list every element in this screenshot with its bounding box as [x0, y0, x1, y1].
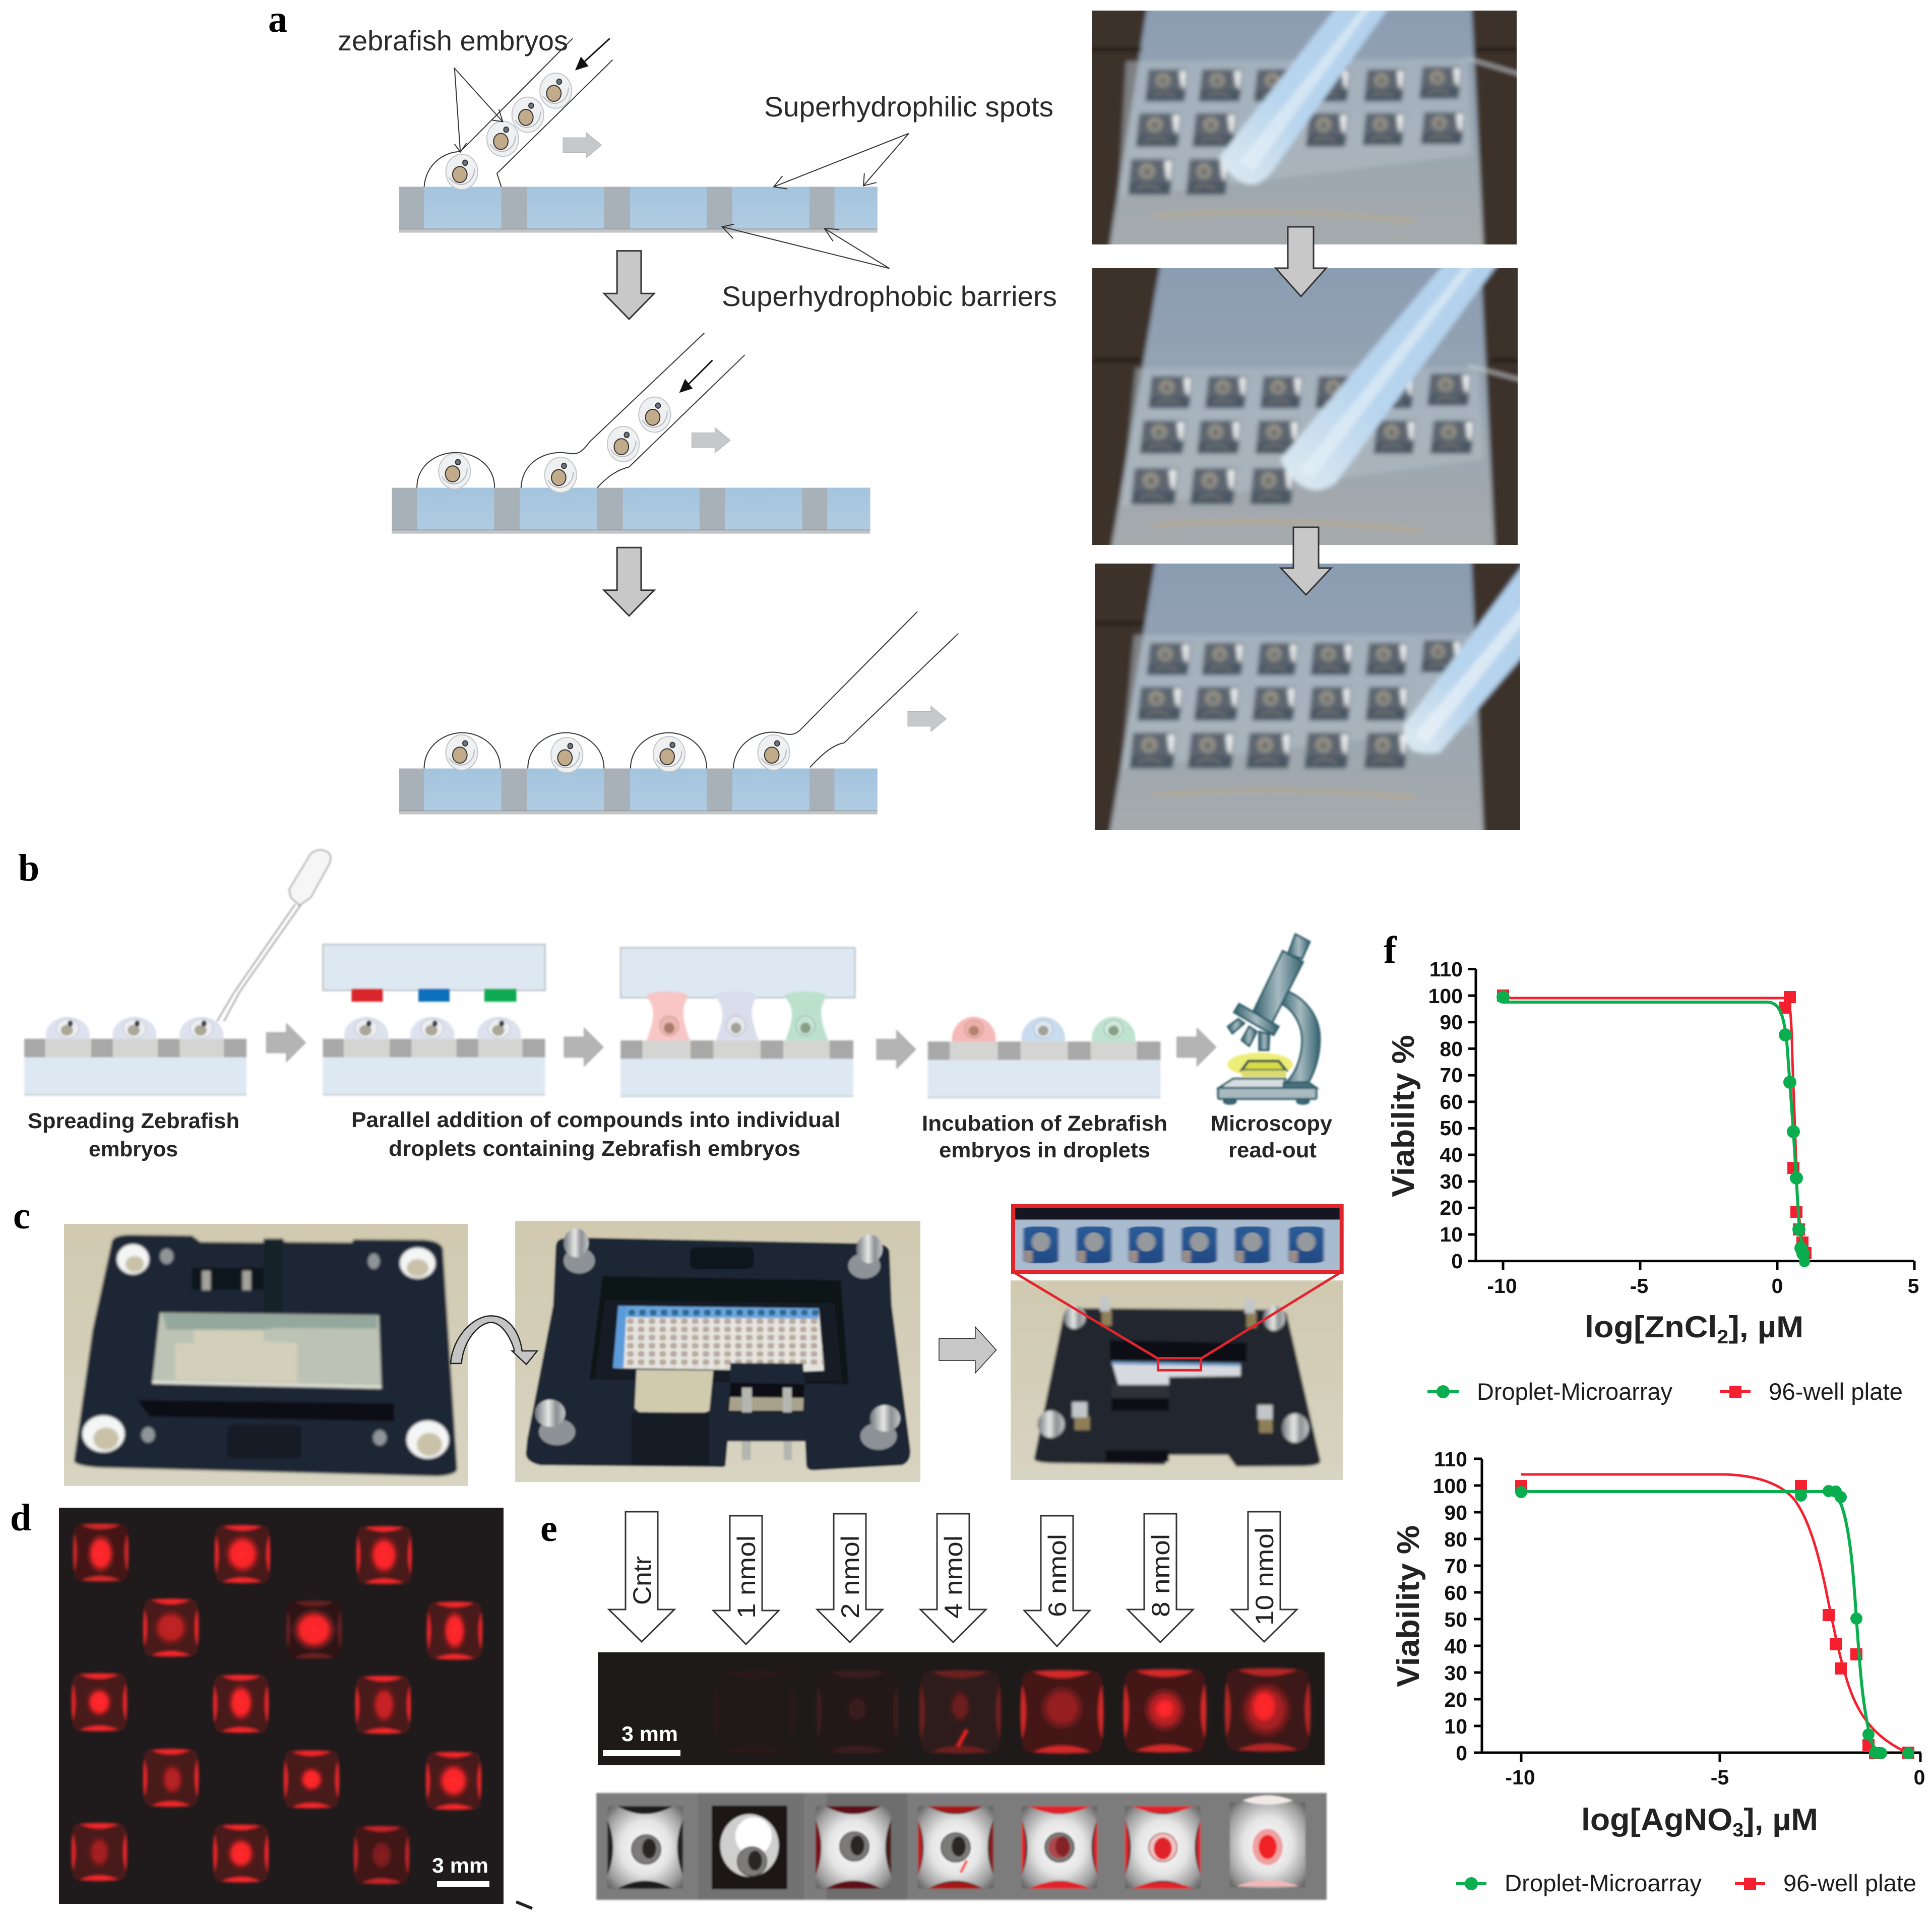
fluorescence strip	[598, 1652, 1325, 1765]
x axis title: 2	[1717, 1327, 1728, 1348]
legend	[1456, 1870, 1916, 1896]
panel letter e: e	[540, 1507, 557, 1550]
big arrow to assembled device	[939, 1327, 996, 1373]
legend	[1427, 1378, 1903, 1405]
down arrow 1	[604, 251, 654, 319]
y axis title: Viability %	[1386, 1035, 1421, 1197]
y tick labels	[1433, 1448, 1467, 1765]
dose labels	[628, 1527, 1279, 1626]
dose labels: 4 nmol	[940, 1535, 968, 1619]
panel a: photo sequence	[1087, 0, 1525, 838]
substrate bar step 3	[399, 769, 878, 815]
overlay well 4 nmol	[918, 1806, 993, 1889]
panel e: dose series	[540, 1507, 1327, 1900]
y tick labels: 90	[1440, 1011, 1463, 1034]
caption parallel addition	[351, 1108, 840, 1161]
Droplet-Microarray curve and markers	[1515, 1485, 1914, 1759]
substrate bar step 1	[399, 187, 878, 233]
panel letter b: b	[18, 847, 39, 889]
photo 3	[1090, 558, 1525, 838]
legend: 96-well plate	[1783, 1870, 1916, 1896]
y tick labels: 70	[1440, 1064, 1463, 1087]
x axis title: ], µM	[1743, 1803, 1818, 1837]
y tick labels: 90	[1444, 1501, 1467, 1524]
dose labels: Cntr	[628, 1556, 656, 1605]
axes	[1474, 1459, 1921, 1762]
dose arrows	[609, 1512, 1297, 1646]
y tick labels: 50	[1444, 1608, 1467, 1631]
x axis title: log[AgNO	[1581, 1803, 1727, 1837]
gray motion arrows	[563, 133, 947, 731]
step 4 slide with coloured droplets	[928, 1017, 1160, 1098]
caption spreading: embryos	[89, 1137, 178, 1161]
caption incubation: embryos in droplets	[939, 1138, 1150, 1162]
y tick labels: 110	[1434, 1448, 1467, 1471]
y tick labels: 60	[1444, 1581, 1467, 1604]
x tick labels	[1505, 1766, 1925, 1789]
caption incubation: Incubation of Zebrafish	[922, 1111, 1167, 1136]
panel d: fluorescence array	[10, 1497, 532, 1908]
step 3 slide with merged columns	[620, 948, 855, 1097]
y tick labels: 100	[1428, 984, 1463, 1008]
caption incubation	[922, 1111, 1167, 1162]
caption microscopy	[1211, 1111, 1332, 1162]
panel letter d: d	[10, 1497, 31, 1539]
black flow arrows	[575, 38, 713, 393]
y tick labels: 110	[1429, 958, 1463, 981]
y tick labels	[1428, 958, 1463, 1273]
scale label e: 3 mm	[621, 1722, 678, 1746]
down arrow 2	[604, 547, 654, 616]
overlay strip	[596, 1793, 1327, 1900]
photo 1	[1087, 0, 1525, 251]
overlay well 6 nmol	[1022, 1806, 1097, 1889]
y tick labels: 20	[1444, 1688, 1467, 1711]
icon: microscope	[1218, 934, 1320, 1104]
x tick labels: -5	[1711, 1766, 1729, 1789]
scale label d: 3 mm	[432, 1853, 488, 1877]
dose labels: 1 nmol	[732, 1535, 761, 1619]
x tick labels	[1487, 1274, 1919, 1297]
icon: curved flip arrow	[451, 1316, 537, 1365]
panel letter c: c	[13, 1195, 30, 1237]
dose labels: 8 nmol	[1147, 1534, 1175, 1617]
x axis title: log[ZnCl	[1585, 1310, 1707, 1344]
scale bar d	[437, 1881, 489, 1887]
pipette	[217, 850, 331, 1021]
x tick labels: 0	[1914, 1766, 1925, 1789]
photo 2	[1087, 262, 1525, 552]
legend: 96-well plate	[1769, 1378, 1903, 1405]
fluorescence background	[59, 1508, 504, 1904]
y tick labels: 20	[1440, 1196, 1463, 1219]
dose labels: 2 nmol	[836, 1535, 864, 1619]
overlay well 10 nmol	[1230, 1796, 1305, 1888]
photo sequence arrow 1	[1276, 227, 1326, 296]
axes	[1468, 969, 1914, 1270]
stray mark	[516, 1902, 532, 1908]
overlay well 8 nmol	[1125, 1806, 1201, 1889]
photo: device back	[57, 1222, 478, 1488]
panel b: compound addition workflow	[18, 847, 1332, 1162]
y tick labels: 10	[1440, 1223, 1463, 1246]
x tick labels: -10	[1487, 1274, 1517, 1297]
y tick labels: 100	[1433, 1474, 1467, 1498]
y tick labels: 40	[1444, 1635, 1467, 1658]
scale bar e	[603, 1750, 680, 1756]
x tick labels: 0	[1772, 1274, 1783, 1297]
inset wells	[1023, 1226, 1324, 1263]
caption spreading	[28, 1109, 239, 1161]
caption microscopy: Microscopy	[1211, 1111, 1332, 1136]
overlay well control	[607, 1806, 683, 1889]
caption microscopy: read-out	[1228, 1138, 1317, 1162]
y tick labels: 0	[1451, 1250, 1463, 1273]
droplets and tube step 2	[417, 333, 745, 492]
dose labels: 6 nmol	[1043, 1534, 1072, 1617]
chart: ZnCl2	[1386, 958, 1919, 1405]
96-well plate curve and markers	[1515, 1474, 1914, 1759]
y tick labels: 70	[1444, 1555, 1467, 1578]
overlay well 1 nmol	[712, 1806, 787, 1889]
callout lines	[455, 69, 909, 269]
chart: AgNO3	[1391, 1448, 1925, 1896]
x tick labels: 5	[1908, 1274, 1919, 1297]
photo: device front with plate	[514, 1220, 922, 1487]
step 2 slide and compound plate	[323, 944, 545, 1095]
Droplet-Microarray curve and markers	[1497, 991, 1810, 1267]
y tick labels: 40	[1440, 1143, 1463, 1166]
caption parallel addition: droplets containing Zebrafish embryos	[389, 1137, 800, 1161]
x tick labels: -10	[1505, 1766, 1535, 1789]
label superhydrophobic barriers: Superhydrophobic barriers	[722, 280, 1057, 312]
panel a: schematic of embryo spreading	[268, 0, 1057, 815]
96-well plate curve and markers	[1497, 989, 1812, 1260]
y tick labels: 60	[1440, 1090, 1463, 1113]
y tick labels: 30	[1444, 1661, 1467, 1685]
panel f: dose response charts	[1384, 929, 1925, 1896]
y tick labels: 80	[1440, 1037, 1463, 1061]
zoom inset with red frame and lines	[1013, 1206, 1342, 1370]
y tick labels: 30	[1440, 1170, 1463, 1193]
caption parallel addition: Parallel addition of compounds into individual	[351, 1108, 840, 1132]
droplets and tube step 3	[424, 611, 958, 773]
caption spreading: Spreading Zebrafish	[28, 1109, 239, 1133]
label zebrafish embryos: zebrafish embryos	[338, 25, 568, 56]
substrate bar step 2	[392, 488, 870, 534]
x axis title: 3	[1732, 1820, 1743, 1841]
droplet and tube step 1	[424, 38, 613, 190]
legend: Droplet-Microarray	[1477, 1378, 1672, 1405]
y tick labels: 50	[1440, 1117, 1463, 1140]
photo sequence arrow 2	[1281, 527, 1331, 595]
y axis title: Viability %	[1391, 1525, 1426, 1687]
y tick labels: 10	[1444, 1715, 1467, 1738]
label superhydrophilic spots: Superhydrophilic spots	[764, 91, 1053, 122]
photo: assembled device	[1005, 1279, 1350, 1482]
fluorescent wells	[72, 1523, 482, 1884]
x axis title: ], µM	[1728, 1310, 1803, 1344]
y tick labels: 0	[1456, 1742, 1467, 1765]
y tick labels: 80	[1444, 1528, 1467, 1551]
overlay well 2 nmol	[816, 1806, 891, 1889]
x tick labels: -5	[1630, 1274, 1648, 1297]
step arrows	[267, 1024, 1216, 1069]
step 1 slide with droplets	[24, 1017, 246, 1095]
panel letter f: f	[1384, 929, 1397, 971]
dose labels: 10 nmol	[1251, 1527, 1279, 1626]
panel c: device photographs	[13, 1195, 1350, 1488]
legend: Droplet-Microarray	[1505, 1870, 1702, 1896]
